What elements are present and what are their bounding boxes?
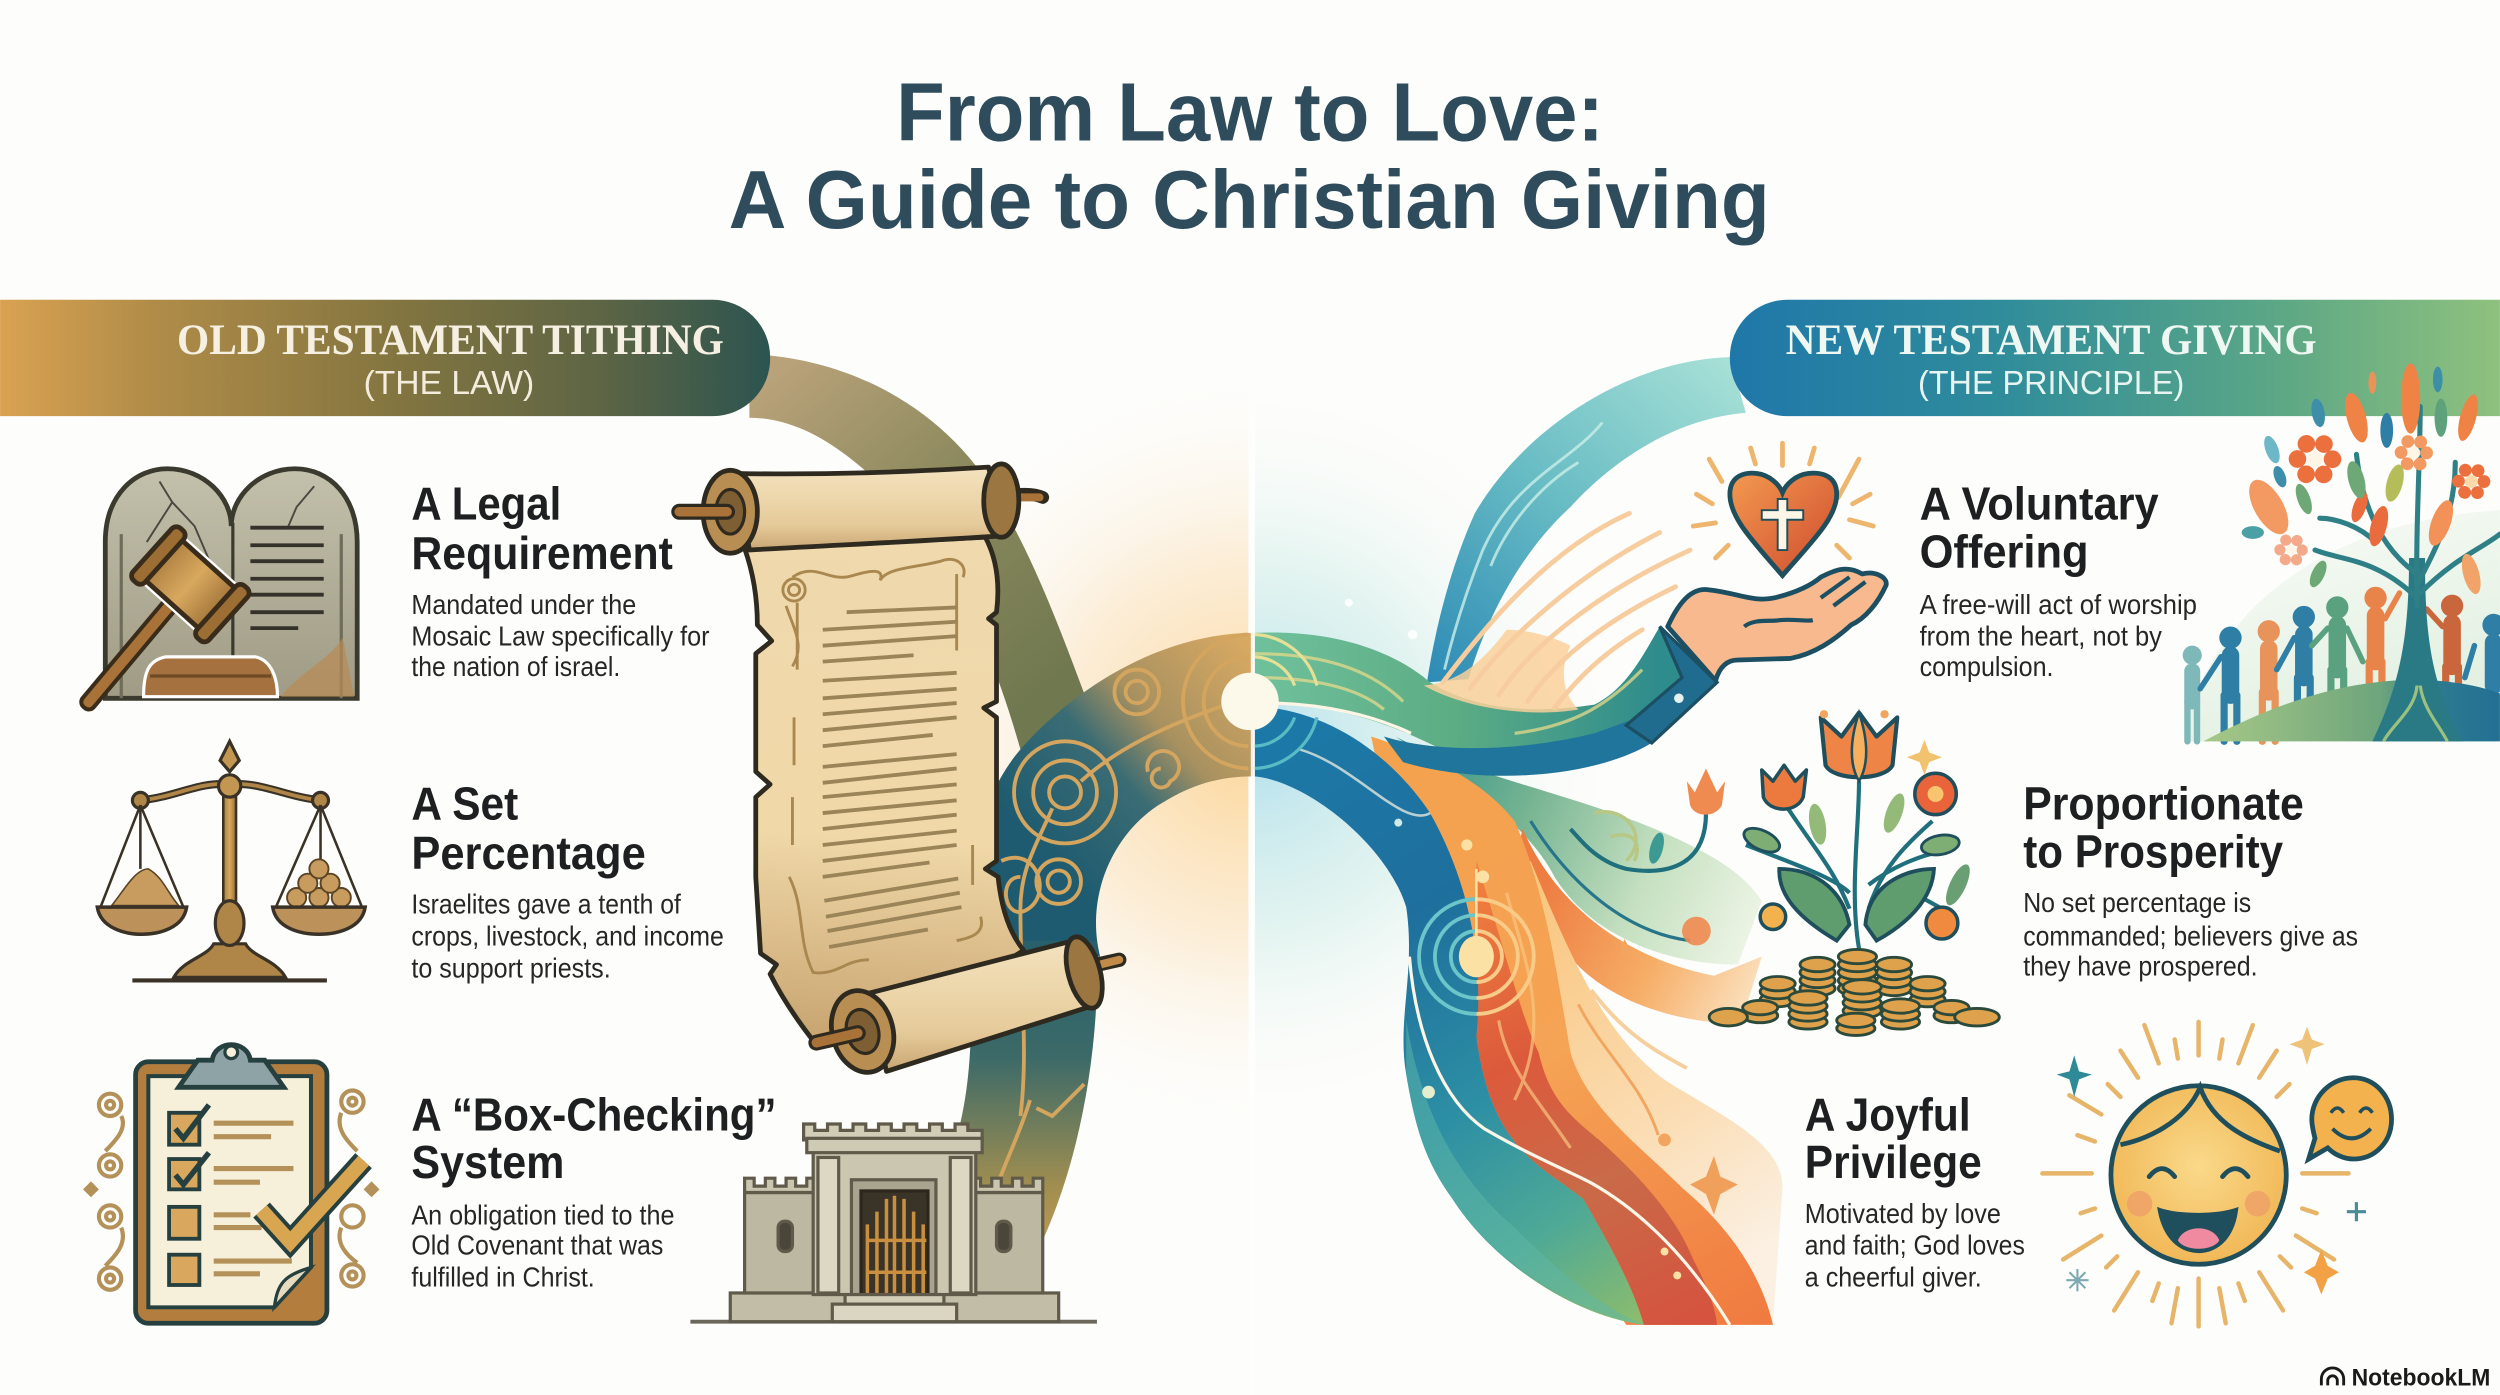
icon: smiling sun face xyxy=(2042,1022,2392,1326)
text: a box-checking system: An obligation tied to the xyxy=(411,1199,674,1230)
text: proportionate to prosperity: they have prospered. xyxy=(2023,951,2258,982)
text: a box-checking system: A “Box-Checking” xyxy=(411,1088,776,1140)
illustration: tree and community xyxy=(2183,363,2500,741)
flowing river: colored stripes xyxy=(1255,706,1782,1325)
text: a voluntary offering: compulsion. xyxy=(1920,651,2054,682)
text: proportionate to prosperity: Proportionate xyxy=(2023,777,2304,829)
center junction with white dot xyxy=(1221,383,1279,1395)
text: a set percentage: crops, livestock, and income xyxy=(411,920,724,951)
text: proportionate to prosperity: commanded; believers give as xyxy=(2023,920,2358,951)
logo: notebooklm: NotebookLM xyxy=(2352,1364,2490,1391)
text: a joyful privilege xyxy=(1805,1088,2025,1293)
title xyxy=(729,65,1770,246)
text: a joyful privilege: a cheerful giver. xyxy=(1805,1262,1982,1293)
text: a legal requirement: Mosaic Law specifically for xyxy=(411,621,710,652)
banner: old testament tithing: (THE LAW) xyxy=(364,365,534,402)
text: a voluntary offering xyxy=(1920,478,2197,682)
text: proportionate to prosperity: No set percentage is xyxy=(2023,887,2251,918)
text: a set percentage xyxy=(411,777,724,983)
flowing band: principle ribbon from banner xyxy=(1427,357,1746,682)
icon: clipboard checklist xyxy=(83,1045,380,1323)
text: a set percentage: A Set xyxy=(411,777,518,829)
text: a set percentage: Percentage xyxy=(411,827,646,879)
text: a voluntary offering: A free-will act of worship xyxy=(1920,589,2197,620)
icon: plant growing from coins xyxy=(1570,710,1999,1035)
text: proportionate to prosperity: to Prosperity xyxy=(2023,825,2283,877)
banner: new testament giving xyxy=(1730,300,2500,416)
banner: new testament giving: NEW TESTAMENT GIVING xyxy=(1786,317,2317,364)
text: a voluntary offering: A Voluntary xyxy=(1920,478,2159,530)
text: a box-checking system: Old Covenant that was xyxy=(411,1230,663,1261)
flowing band: green hand sleeve xyxy=(1253,599,1717,776)
title: From Law to Love: xyxy=(896,65,1604,158)
icon: stone tablets with gavel xyxy=(43,469,357,739)
icon: balance scale xyxy=(97,741,365,980)
text: a legal requirement: Requirement xyxy=(411,527,673,579)
text: a joyful privilege: A Joyful xyxy=(1805,1088,1971,1140)
illustration: parchment scroll xyxy=(679,464,1119,1079)
text: a legal requirement: A Legal xyxy=(411,478,561,530)
text: a set percentage: to support priests. xyxy=(411,952,611,983)
text: a voluntary offering: from the heart, not by xyxy=(1920,621,2162,652)
banner: old testament tithing xyxy=(0,300,770,416)
text: a box-checking system: fulfilled in Christ. xyxy=(411,1262,595,1293)
text: a voluntary offering: Offering xyxy=(1920,526,2089,578)
illustration: stone temple xyxy=(690,1124,1097,1322)
text: a legal requirement: Mandated under the xyxy=(411,589,636,620)
flowing band: toward plant and coins xyxy=(1395,737,1762,1024)
text: a set percentage: Israelites gave a tenth of xyxy=(411,889,681,920)
text: a box-checking system: System xyxy=(411,1136,564,1188)
text: a joyful privilege: Privilege xyxy=(1805,1136,1982,1188)
flowing band: law path behind the scroll xyxy=(749,354,1253,1240)
text: proportionate to prosperity xyxy=(2023,777,2358,982)
banner: new testament giving: (THE PRINCIPLE) xyxy=(1918,365,2184,402)
title: A Guide to Christian Giving xyxy=(729,153,1770,246)
text: a legal requirement xyxy=(411,478,710,682)
icon: open hand with heart xyxy=(1424,443,1886,743)
text: a joyful privilege: Motivated by love xyxy=(1805,1198,2001,1229)
text: a joyful privilege: and faith; God loves xyxy=(1805,1230,2025,1261)
text: a box-checking system xyxy=(411,1088,776,1293)
text: a legal requirement: the nation of israel. xyxy=(411,651,620,682)
banner: old testament tithing: OLD TESTAMENT TITHING xyxy=(177,317,724,364)
